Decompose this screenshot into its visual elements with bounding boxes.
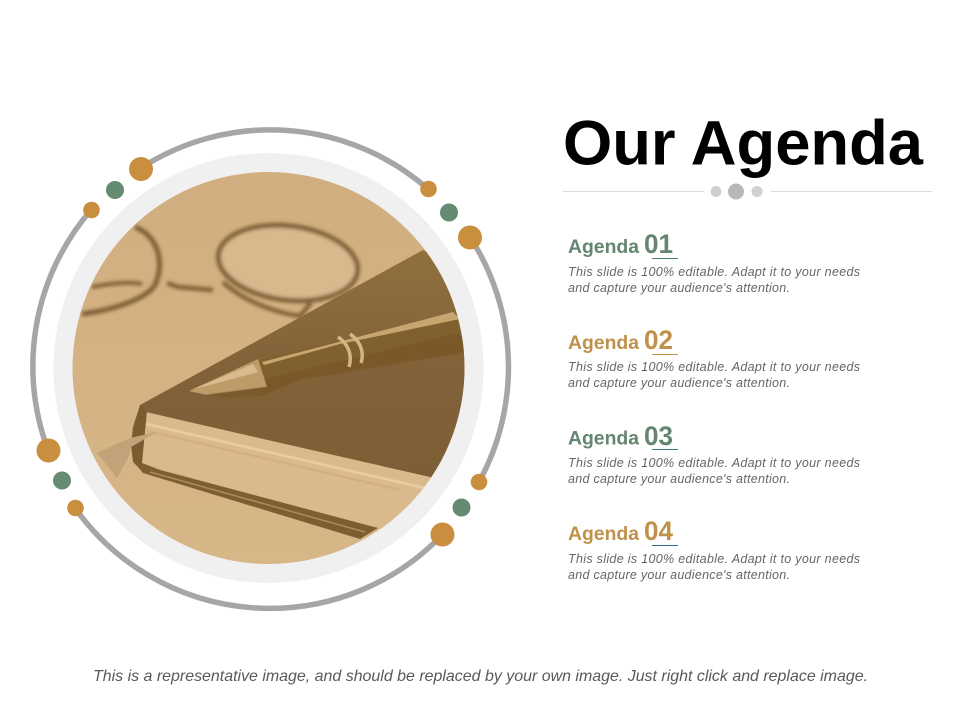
agenda item 01	[568, 229, 860, 295]
agenda item 03: This slide is 100% editable. Adapt it to your needs	[568, 456, 860, 470]
agenda item 03	[568, 421, 860, 486]
bottom cover strip	[133, 461, 378, 539]
pen	[260, 332, 464, 396]
agenda item 04: and capture your audience's attention.	[568, 568, 790, 582]
agenda item 03: and capture your audience's attention.	[568, 472, 790, 486]
agenda item 01: and capture your audience's attention.	[568, 281, 790, 295]
circular image frame	[33, 130, 508, 608]
agenda item 02	[568, 325, 860, 390]
agenda item 01: This slide is 100% editable. Adapt it to your needs	[568, 265, 860, 279]
agenda item 02: and capture your audience's attention.	[568, 376, 790, 390]
agenda item 01: 01	[644, 229, 673, 259]
book cover	[140, 250, 475, 480]
book pages	[148, 412, 431, 530]
agenda item 04: 04	[644, 516, 673, 546]
title: Our Agenda	[563, 108, 924, 178]
agenda item 04: This slide is 100% editable. Adapt it to your needs	[568, 552, 860, 566]
outer ring arcs	[33, 130, 508, 608]
agenda item 02: 02	[644, 325, 673, 355]
photo: book, pen and glasses	[70, 170, 475, 568]
footer note: This is a representative image, and should be replaced by your own image. Just right click and replace image.	[93, 668, 868, 685]
agenda item 03: 03	[644, 421, 673, 451]
glasses	[82, 218, 362, 316]
bookmark ribbon	[97, 432, 157, 478]
title divider with dots	[563, 184, 932, 200]
book spine	[131, 405, 147, 472]
agenda item 03: Agenda	[568, 428, 639, 450]
light ring	[64, 163, 474, 573]
agenda item 02: Agenda	[568, 333, 639, 354]
agenda item 04	[568, 516, 860, 582]
agenda item 04: Agenda	[568, 524, 639, 545]
decorative dots	[36, 157, 487, 546]
agenda item 02: This slide is 100% editable. Adapt it to your needs	[568, 360, 860, 374]
agenda item 01: Agenda	[568, 237, 639, 258]
